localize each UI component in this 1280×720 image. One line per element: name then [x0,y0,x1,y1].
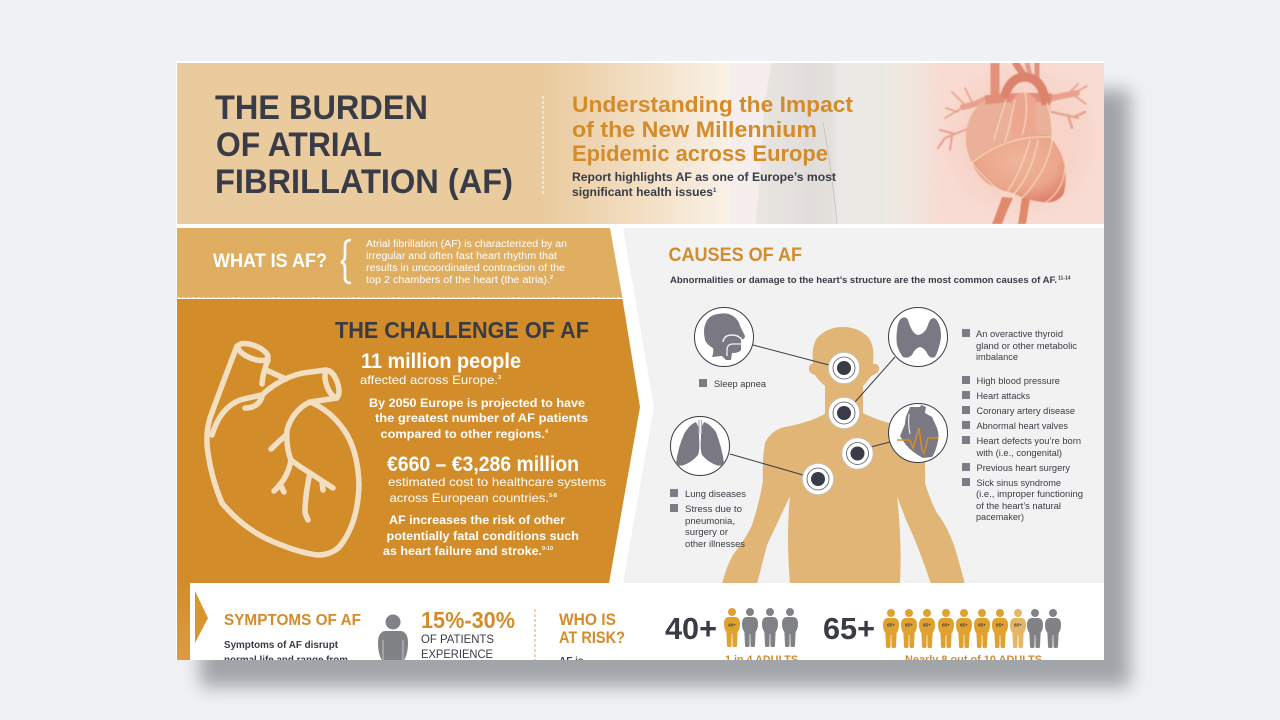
report note: significant health issues [572,185,713,199]
symptoms of AF: SYMPTOMS OF AF [224,612,361,629]
cause list: lungs: other illnesses [685,539,746,549]
pictogram: nearly 8 of 10: 65+ [887,622,895,628]
title: OF ATRIAL [216,126,382,164]
definition text: Atrial fibrillation (AF) is characterized by an [366,239,567,250]
stat: 15-30%: OF PATIENTS [421,632,494,646]
title: THE BURDEN [215,89,428,127]
body silhouette [722,327,965,584]
icon: heart with ECG [888,404,948,462]
cause list: heart: High blood pressure [976,376,1060,386]
stat: 11 million: 11 million people [361,350,521,373]
stat: 40+: 1 in 4 ADULTS [725,654,798,666]
pictogram: 1 in 4: 40+ [728,622,736,628]
stat: risk: 9-10 [542,546,553,552]
cause list: heart: (i.e., improper functioning [976,489,1083,499]
icon: brace [341,240,351,283]
icon: target markers [802,352,873,494]
icon: thyroid [888,308,948,366]
subtitle: Epidemic across Europe [572,141,828,166]
causes intro: 11-14 [1058,276,1071,282]
stat: 15-30%: 15%-30% [421,607,515,633]
stat: 11 million [360,350,521,387]
stat: 2050 projection [369,396,588,441]
stat: cost: estimated cost to healthcare systems [388,475,606,489]
stat: risk: potentially fatal conditions such [386,529,579,543]
pictogram: nearly 8 of 10: 65+ [996,622,1004,628]
heading: challenge: THE CHALLENGE OF AF [335,317,589,343]
stat: 65+: 65+ [823,611,875,646]
stat: cost [387,453,606,505]
header divider [542,96,544,194]
stat: 2050 projection: the greatest number of AF patients [375,411,588,425]
who is at risk: AT RISK? [559,628,625,647]
symptoms of AF [224,614,360,660]
definition text [366,239,567,286]
pictogram: nearly 8 of 10: 65+ [942,622,950,628]
icon: lungs [670,416,730,476]
stat: 2050 projection: 4 [545,429,549,435]
pictogram: nearly 8 of 10: 65+ [923,622,931,628]
stat: 2050 projection: By 2050 Europe is projected to have [369,396,585,410]
connector lines [730,345,895,475]
stat: risk: AF increases the risk of other [389,513,565,527]
report note: 1 [713,188,717,194]
cause list: heart: Abnormal heart valves [976,421,1069,431]
cause list: heart: with (i.e., congenital) [975,448,1062,458]
cause list: lungs [670,489,747,549]
stat: 40+ [665,608,798,660]
icon: heart outline [207,340,359,555]
cause list: heart [962,376,1083,522]
stat: risk [383,515,578,555]
cause list: heart: Heart defects you’re born [976,436,1081,446]
cause list: thyroid: gland or other metabolic [976,341,1078,351]
pictogram: nearly 8 of 10: 65+ [1014,622,1022,628]
pictogram: nearly 8 of 10: 65+ [978,622,986,628]
cause list: heart: Heart attacks [976,391,1030,401]
stat: 15-30%: EXPERIENCE [421,647,493,661]
definition text: 2 [550,275,553,281]
stat: risk: as heart failure and stroke. [383,544,542,558]
header image: torso and heart [756,63,1104,224]
panel: causes of AF [623,228,1104,584]
cause list: sleep apnea: Sleep apnea [714,379,766,389]
report note: Report highlights AF as one of Europe’s most [572,170,836,184]
subtitle: Understanding the Impact [572,92,854,117]
cause list: heart: pacemaker) [976,512,1024,522]
who is at risk: WHO IS [559,610,616,629]
stat: 65+ [823,609,1061,666]
cause list: heart: Coronary artery disease [976,406,1075,416]
stat: cost: €660 – €3,286 million [387,453,579,476]
stat: 11 million: affected across Europe. [360,373,498,387]
infographic page [176,40,1125,667]
heading: what is AF: WHAT IS AF? [213,251,327,272]
panel: what is AF [177,228,622,298]
definition text: irregular and often fast heart rhythm that [366,251,557,262]
subtitle [572,92,854,166]
cause list: thyroid: An overactive thyroid [976,329,1063,339]
cause list: thyroid [962,329,1078,362]
heart illustration [938,62,1087,224]
panel: bottom strip [177,583,1061,660]
pictogram: nearly 8 of 10: 65+ [960,622,968,628]
stat: 11 million: 3 [498,375,501,381]
stat: 40+: 40+ [665,611,717,646]
causes intro: Abnormalities or damage to the heart’s structure are the most common causes of AF. [670,275,1057,285]
definition text: results in uncoordinated contraction of the [366,263,565,274]
cause list: heart: of the heart’s natural [976,501,1061,511]
panel: challenge of AF [177,298,640,583]
header banner [177,63,1104,224]
symptoms of AF: normal life and range from [224,655,348,666]
pictogram: nearly 8 of 10: 65+ [905,622,913,628]
stat: 65+: Nearly 8 out of 10 ADULTS [905,654,1042,666]
pictogram: nearly 8 of 10 [883,609,1061,648]
stat: cost: 5-8 [549,493,557,499]
who is at risk [559,614,624,660]
title: FIBRILLATION (AF) [215,163,513,201]
heading: causes: CAUSES OF AF [668,245,802,266]
stat: 2050 projection: compared to other regions. [380,427,545,441]
cause list: thyroid: imbalance [976,352,1018,362]
drop shadow behind page [200,90,1130,687]
arrow marker [195,591,208,643]
subtitle: of the New Millennium [572,117,817,142]
symptoms of AF: Symptoms of AF disrupt [224,640,339,651]
definition text: top 2 chambers of the heart (the atria). [366,275,550,286]
cause list: heart: Previous heart surgery [976,463,1071,473]
cause list: lungs: Lung diseases [685,489,747,499]
stat: 15-30% [422,612,514,658]
cause list: lungs: pneumonia, [685,516,735,526]
cause list: lungs: Stress due to [685,504,742,514]
title [215,89,513,201]
cause list: lungs: surgery or [685,527,728,537]
icon: sleep apnea head [694,308,754,366]
stat: cost: across European countries. [390,491,549,505]
cause list: heart: Sick sinus syndrome [976,478,1061,488]
report note [572,170,836,199]
icon: patient figure [378,614,408,662]
who is at risk: AF is [559,656,584,667]
